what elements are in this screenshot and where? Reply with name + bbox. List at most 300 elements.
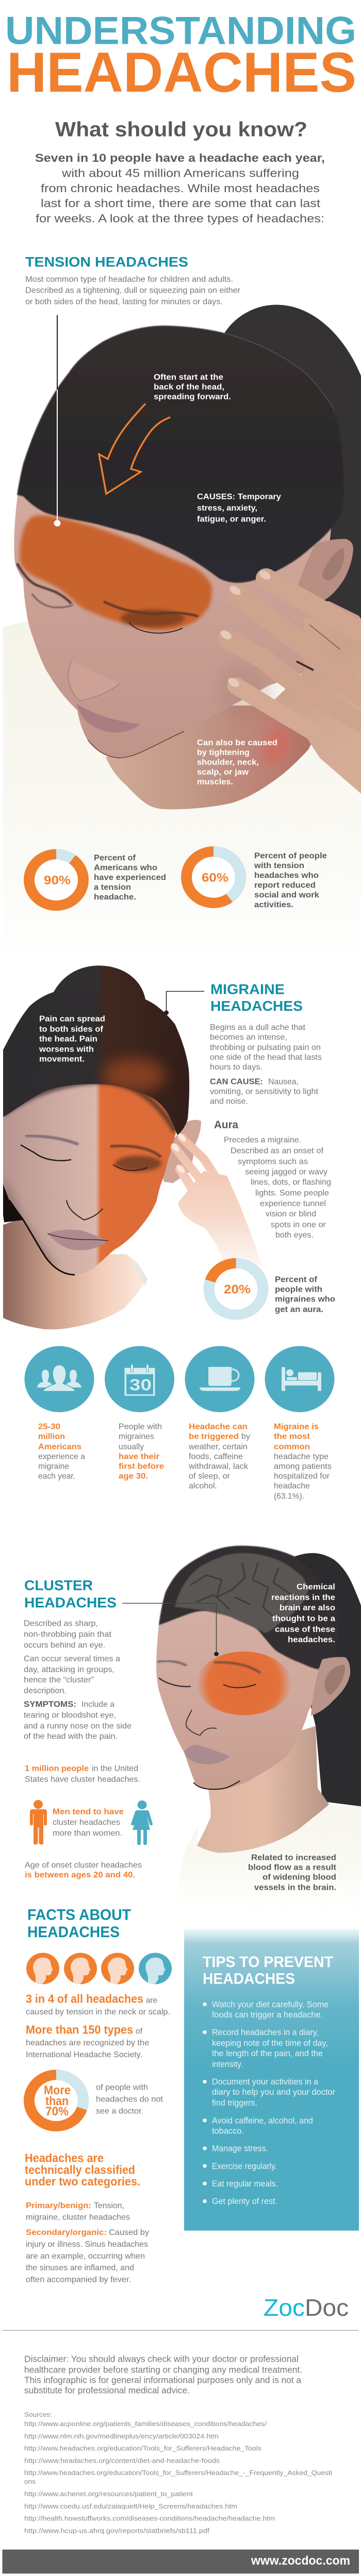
stat text: 20 percent: [275, 1275, 335, 1314]
nail top: [177, 1132, 187, 1143]
stat: 1 million people: in the United: [92, 1764, 138, 1773]
callout: blood flow: vessels in the brain.: [254, 1883, 336, 1892]
back hair: [224, 304, 361, 674]
left eye: [32, 594, 73, 607]
cluster description: Can occur several times a: [24, 1654, 120, 1664]
far finger: [328, 605, 356, 619]
finger one: [266, 578, 361, 632]
ear: [163, 1120, 201, 1183]
donut: more than 70 percent: More: [44, 2084, 71, 2097]
stat text: 60 percent: activities.: [254, 900, 293, 909]
illustration: tension head: [3, 304, 361, 960]
callout: pain can spread: to both sides of: [39, 1025, 104, 1034]
stat: triggers: [188, 1422, 251, 1490]
sources: http://www.headaches.org/content/diet-and-headache-foods: [24, 2457, 220, 2464]
cup handle: [232, 1369, 239, 1381]
stat text: 60 percent: [254, 851, 327, 909]
tip: diet: foods can trigger a headache.: [212, 2010, 323, 2020]
callout: causes: stress, anxiety,: [197, 503, 257, 513]
nail four: [226, 676, 241, 689]
face: [3, 1078, 181, 1279]
stat: men tend to have: more than women.: [53, 1828, 122, 1838]
disclaimer: substitute for professional medical advice.: [24, 2385, 190, 2395]
title: UNDERSTANDING: [5, 8, 356, 53]
nose: [67, 1200, 103, 1220]
cup: [208, 1367, 232, 1386]
stat text: 90 percent: have experienced: [94, 873, 166, 882]
donut: 90 percent: 90%: [44, 874, 71, 887]
stat text: 20 percent: Percent of: [275, 1275, 318, 1284]
aura heading: Aura: [214, 1118, 239, 1131]
calendar ring right: [146, 1364, 149, 1372]
callout: blood flow: [248, 1853, 337, 1892]
stat: most common type: headache: [274, 1481, 310, 1490]
fact: 3 in 4: caused by tension in the neck or scalp.: [26, 2008, 170, 2016]
migraine can cause: and noise.: [210, 1097, 248, 1106]
fact: 3 in 4: 3 in 4 of all headaches: [26, 1992, 143, 2005]
tip: stress: Manage stress.: [212, 2144, 268, 2153]
stat: most common type: headache type: [274, 1452, 329, 1461]
stat: 25-30 million: 25-30: [38, 1422, 60, 1431]
migraine description: throbbing or pulsating pain on: [210, 1043, 321, 1052]
aura text: seeing jagged or wavy: [245, 1167, 328, 1176]
stat: 1 million people: States have cluster headaches.: [25, 1775, 140, 1784]
panel: tips to prevent headaches: [184, 1929, 359, 2231]
arrow: [99, 404, 170, 494]
icon: coffee cup: [185, 1346, 255, 1412]
tips heading: [203, 1954, 333, 1987]
heading: migraine headaches: HEADACHES: [210, 997, 303, 1014]
icon: people: [25, 1346, 94, 1412]
palm: [268, 617, 361, 794]
finger low: [180, 1169, 211, 1220]
logo: ZocDoc: [264, 2295, 349, 2321]
stat: triggers: alcohol.: [189, 1481, 217, 1490]
sources: Sources:: [24, 2411, 52, 2418]
donut: 60 percent: [187, 846, 246, 903]
stat: 25-30 million: experience a: [38, 1452, 85, 1461]
ear inner: [324, 1665, 345, 1695]
stat: age of onset: [25, 1860, 142, 1879]
intro text: last for a short time, there are some that can last: [41, 197, 321, 210]
right person: [65, 1370, 81, 1387]
callout: can also be caused: by tightening: [197, 748, 250, 757]
stat text: 20 percent: get an aura.: [275, 1305, 323, 1314]
stat: before age 30: usually: [119, 1442, 144, 1451]
head four: [139, 1953, 172, 1984]
nose: [68, 662, 120, 701]
tip: document: find triggers.: [212, 2098, 257, 2108]
finger four: [236, 686, 309, 730]
aura text: vision or blind: [266, 1210, 316, 1218]
aura text: lights. Some people: [255, 1189, 329, 1197]
calendar frame: [125, 1368, 155, 1396]
fact: classified: [25, 2151, 140, 2188]
fact: secondary organic: Secondary/organic:: [26, 2228, 107, 2237]
ear: [297, 539, 353, 601]
stat text: 90 percent: Americans who: [94, 863, 157, 872]
tension description: [25, 275, 241, 306]
stat: most common type: (63.1%).: [274, 1492, 304, 1501]
cluster symptoms: [24, 1700, 132, 1741]
illustration: cluster head: [156, 1546, 361, 1911]
tips heading: TIPS TO PREVENT: [203, 1954, 333, 1971]
shirt: [173, 1804, 361, 1911]
sources: http://www.headaches.org/education/Tools_for_Sufferers/Headache_Tools: [24, 2445, 261, 2452]
stat text: 60 percent: report reduced: [254, 880, 316, 890]
right brow: [214, 1662, 260, 1673]
stat text: 60 percent: Percent of people: [254, 851, 327, 860]
hair: [17, 326, 344, 583]
nail mid: [170, 1142, 180, 1153]
stat text: 20 percent: people with: [275, 1285, 322, 1294]
stat: before age 30: migraines: [119, 1432, 154, 1441]
stat: 25-30 million: [38, 1422, 85, 1481]
nail low: [175, 1164, 186, 1174]
callout line with dot: [54, 315, 61, 527]
fact: do not see a doctor: [96, 2083, 163, 2115]
sources: http://www.achenet.org/resources/patient_to_patient: [24, 2490, 193, 2498]
sources: http://www.coedu.usf.edu/zalaquett/Help_Screens/headaches.htm: [24, 2502, 237, 2510]
callout: chemical reactions: cause of these: [275, 1625, 335, 1634]
stat text: 20 percent: migraines who: [275, 1295, 335, 1304]
callout: can also be caused: [197, 738, 277, 786]
migraine description: becomes an intense,: [210, 1032, 287, 1042]
stat: 25-30 million: Americans: [38, 1442, 81, 1451]
cluster description: non-throbbing pain that: [24, 1630, 112, 1639]
callout: chemical reactions: Chemical: [297, 1582, 335, 1591]
sources: http://www.acponline.org/patients_families/diseases_conditions/headaches/: [24, 2420, 267, 2428]
chin line: [193, 1781, 240, 1789]
right brow: [104, 602, 198, 616]
callout: pain can spread: movement.: [39, 1055, 85, 1064]
disclaimer: [24, 2354, 302, 2395]
callout: pain can spread: the head. Pain: [39, 1035, 97, 1044]
leader line: cluster: [122, 1603, 219, 1656]
callout: often start: [154, 372, 231, 401]
callout: chemical reactions: brain are also: [280, 1603, 335, 1613]
cluster symptoms: tearing or bloodshot eye,: [24, 1710, 116, 1720]
hand: [219, 569, 361, 794]
fact: 150 types: of: [136, 2027, 142, 2036]
heading: cluster headaches: [24, 1577, 117, 1611]
heading: migraine headaches: MIGRAINE: [210, 981, 285, 997]
callout: can also be caused: muscles.: [197, 777, 233, 786]
callout: causes: CAUSES: Temporary: [197, 492, 281, 501]
stat: 1 million people: [25, 1764, 140, 1784]
heading: cluster headaches: CLUSTER: [24, 1577, 93, 1594]
stat: most common type: among patients: [274, 1462, 332, 1471]
stat text: 90 percent: Percent of: [94, 853, 136, 862]
wrist: [178, 1171, 263, 1269]
footer bar: www.zocdoc.com: [251, 2554, 350, 2568]
migraine description: Begins as a dull ache that: [210, 1023, 306, 1032]
stat: most common type: the most: [274, 1432, 310, 1441]
callout: often start: back of the head,: [154, 382, 224, 392]
intro text: Seven in 10 people have a headache each year,: [35, 151, 325, 164]
tip: record: intensity.: [212, 2059, 243, 2069]
aura text: Precedes a migraine.: [224, 1136, 301, 1144]
hand: [170, 1132, 263, 1269]
callout: pain can spread: [39, 1014, 105, 1064]
stat text: 90 percent: [94, 853, 166, 902]
logo: ZocDoc: Zoc: [264, 2295, 305, 2321]
centre person: [43, 1365, 75, 1392]
aura text: [224, 1136, 331, 1240]
callout: can also be caused: scalp, or jaw: [197, 768, 249, 776]
stat: before age 30: first before: [119, 1462, 164, 1471]
intro text: [35, 151, 325, 225]
fact: do not see a doctor: see a doctor.: [96, 2107, 143, 2115]
forehead hairline blend: [3, 1082, 175, 1132]
logo: ZocDoc: Doc: [305, 2295, 349, 2321]
cluster symptoms: of the head with the pain.: [24, 1732, 118, 1741]
cluster description: hence the “cluster”: [24, 1675, 94, 1684]
cluster description: description.: [24, 1686, 67, 1695]
right eye: [223, 1684, 256, 1688]
aura text: spots in one or: [271, 1220, 326, 1229]
migraine description: [210, 1023, 322, 1072]
callout: pain can spread: Pain can spread: [39, 1014, 105, 1024]
leader line: migraine: [164, 991, 204, 1015]
tip: diet: Watch your diet carefully. Some: [212, 1999, 329, 2009]
footer bar: [2, 2550, 359, 2573]
left brow: [25, 1136, 78, 1144]
callout: can also be caused: Can also be caused: [197, 738, 277, 747]
stat: before age 30: People with: [119, 1422, 162, 1431]
sleeper arm: [287, 1377, 297, 1380]
right eye shadow: [121, 609, 185, 627]
neck: [3, 1215, 145, 1329]
left hair strand: [3, 1184, 23, 1223]
migraine description: one side of the head that lasts: [210, 1053, 322, 1062]
disclaimer: Disclaimer: You should always check with your doctor or professional: [24, 2354, 299, 2364]
nose: [186, 1710, 217, 1735]
subtitle: What should you know?: [55, 117, 307, 141]
tips heading: HEADACHES: [203, 1971, 295, 1987]
fact: classified: Headaches are: [25, 2151, 104, 2164]
tip: avoid: tobacco.: [212, 2126, 244, 2136]
donut: 20 percent: [205, 1258, 263, 1315]
right brow: [110, 1146, 161, 1157]
cheek shading: [217, 662, 268, 720]
stat: men tend to have: [53, 1807, 124, 1838]
aura text: experience tunnel: [260, 1199, 326, 1208]
heading: facts about headaches: HEADACHES: [27, 1924, 120, 1941]
intro text: for weeks. A look at the three types of headaches:: [36, 212, 324, 225]
intro text: with about 45 million Americans suffering: [61, 166, 299, 179]
left eye: [159, 1678, 191, 1687]
finger three: [228, 639, 361, 723]
ear: [311, 1657, 350, 1716]
cluster symptoms: and a runny nose on the side: [24, 1721, 132, 1731]
callout: blood flow: Related to increased: [251, 1853, 336, 1862]
migraine can cause: CAN CAUSE:: [210, 1077, 263, 1086]
neck: [106, 705, 330, 809]
fact: classified: technically classified: [25, 2163, 135, 2176]
icon: bed: [265, 1346, 334, 1412]
jaw line: [9, 1200, 75, 1275]
saucer: [200, 1387, 240, 1391]
lips: [184, 1745, 230, 1765]
fact: 150 types: headaches are recognized by the: [26, 2038, 149, 2047]
panel: tension headaches heading: TENSION HEADACHES: [25, 254, 188, 269]
fact: secondary organic: often accompanied by fever.: [26, 2275, 131, 2284]
stat: most common type: Migraine is: [274, 1422, 319, 1431]
cluster symptoms: SYMPTOMS:: [24, 1700, 76, 1709]
stat text: 60 percent: social and work: [254, 890, 319, 900]
heading: facts about headaches: FACTS ABOUT: [27, 1907, 131, 1924]
fact: secondary organic: the sinuses are inflamed, and: [26, 2263, 134, 2273]
left brow: [158, 1661, 187, 1666]
stat: men tend to have: cluster headaches: [53, 1818, 120, 1827]
callout: can also be caused: shoulder, neck,: [197, 758, 259, 767]
icon: man: [30, 1800, 47, 1844]
tip: diet: [203, 1999, 329, 2020]
donut: more than 70 percent: 70%: [45, 2105, 69, 2119]
callout: often start: Often start at the: [154, 372, 223, 382]
sources: http://www.nlm.nih.gov/medlineplus/ency/article/003024.htm: [24, 2432, 219, 2440]
left brow: [17, 564, 71, 604]
bun and hair: [3, 965, 189, 1135]
fact: 150 types: More than 150 types: [26, 2023, 133, 2036]
fact: secondary organic: Caused by: [109, 2228, 150, 2237]
donut: 20 percent: 20%: [224, 1283, 251, 1296]
illustration: migraine head: [3, 965, 263, 1329]
ear inner: [322, 548, 344, 581]
cluster description: occurs behind an eye.: [24, 1640, 105, 1650]
finger two: [237, 595, 361, 696]
tip: record: keeping note of the time of day,: [212, 2038, 328, 2048]
disclaimer: This infographic is for general informational purposes only and is not a: [24, 2375, 301, 2385]
head three: [101, 1953, 134, 1984]
stat: age of onset: Age of onset cluster headaches: [25, 1860, 142, 1870]
finger top: [182, 1138, 228, 1195]
callout: causes: [197, 492, 281, 524]
donut: 90 percent: [29, 849, 84, 906]
jaw shading left: [3, 1176, 58, 1269]
fact: do not see a doctor: headaches do not: [96, 2095, 163, 2104]
bun left shade: [54, 965, 99, 992]
lips: [47, 1230, 108, 1250]
heading: cluster headaches: HEADACHES: [24, 1595, 117, 1611]
stat: most common type: hospitalized for: [274, 1471, 330, 1481]
stat: 25-30 million: each year.: [38, 1471, 75, 1481]
brain: [175, 1553, 308, 1633]
callout: chemical reactions: thought to be a: [272, 1614, 336, 1623]
sources: http://www.hcup-us.ahrq.gov/reports/statbriefs/sb111.pdf: [24, 2527, 209, 2534]
cluster description: day, attacking in groups,: [24, 1665, 114, 1674]
stat: triggers: Headache can: [189, 1422, 248, 1431]
callout: causes: fatigue, or anger.: [197, 515, 266, 524]
donut: more than 70 percent: [29, 2070, 89, 2126]
fact: primary benign: Primary/benign:: [26, 2201, 91, 2210]
sources: http://health.howstuffworks.com/diseases-conditions/headache/headache.htm: [24, 2515, 275, 2522]
tip: document: Document your activities in a: [212, 2077, 319, 2087]
face: [14, 326, 340, 758]
shirt: [3, 621, 361, 960]
cluster description: Described as sharp,: [24, 1619, 98, 1628]
donut: 60 percent: 60%: [202, 871, 228, 885]
pain glow: [196, 1652, 291, 1715]
stat text: 90 percent: headache.: [94, 892, 136, 902]
migraine description: hours to days.: [210, 1062, 262, 1072]
cluster description: [24, 1619, 120, 1695]
tip: document: [203, 2077, 335, 2108]
back hair: [289, 1553, 361, 1806]
stat: age of onset: is between ages 20 and 40.: [25, 1870, 135, 1879]
stat: men tend to have: Men tend to have: [53, 1807, 124, 1816]
tip: avoid: Avoid caffeine, alcohol, and: [212, 2116, 313, 2125]
callout: pain can spread: worsens with: [39, 1045, 94, 1054]
stat text: 60 percent: with tension: [254, 861, 304, 870]
fact: do not see a doctor: of people with: [96, 2083, 148, 2092]
stat: 1 million people: 1 million people: [25, 1764, 89, 1773]
stat text: 60 percent: headaches who: [254, 871, 319, 880]
stat: most common type: common: [274, 1442, 310, 1451]
stat: before age 30: have their: [119, 1452, 160, 1461]
sources: [24, 2411, 332, 2534]
fact: primary benign: Tension,: [94, 2201, 124, 2210]
fact: 3 in 4: are: [146, 1996, 157, 2005]
stat: triggers: of sleep, or: [189, 1471, 231, 1481]
blanket: [298, 1372, 317, 1380]
stat: triggers: weather, certain: [188, 1442, 248, 1451]
stat: most common type: [274, 1422, 332, 1501]
fact: secondary organic: injury or illness. Sinus headaches: [26, 2240, 148, 2249]
head one: [26, 1953, 59, 1984]
mouth line: [47, 1233, 108, 1241]
migraine can cause: [210, 1077, 319, 1106]
stat: triggers: withdrawal, lack: [188, 1462, 249, 1471]
stat text: 90 percent: a tension: [94, 883, 131, 892]
tension description: Described as a tightening, dull or squeezing pain on either: [25, 286, 241, 295]
tip: record: Record headaches in a diary,: [212, 2028, 319, 2037]
stat: 25-30 million: million: [38, 1432, 65, 1441]
icon row: heads: [26, 1953, 172, 1984]
nail three: [219, 629, 233, 641]
neck: [197, 1726, 329, 1853]
icon: calendar: [105, 1346, 174, 1412]
stat: triggers: be triggered: [189, 1432, 239, 1441]
callout: often start: spreading forward.: [154, 392, 231, 401]
fact: secondary organic: [26, 2228, 150, 2284]
stat: triggers: foods, caffeine: [189, 1452, 243, 1461]
heading: facts about headaches: [27, 1907, 131, 1941]
icon: woman: [131, 1801, 153, 1845]
donut: more than 70 percent: than: [45, 2095, 69, 2108]
sleeper head: [286, 1369, 293, 1376]
title: [5, 8, 356, 104]
aura text: both eyes.: [275, 1230, 314, 1240]
sources: ons: [24, 2478, 36, 2485]
fact: 150 types: [26, 2023, 149, 2059]
right eye: [113, 1164, 147, 1171]
nail two: [228, 584, 242, 597]
nails: [258, 569, 272, 582]
hair cap: [159, 1546, 340, 1669]
stat: before age 30: age 30.: [119, 1471, 148, 1481]
pain area: [20, 515, 212, 631]
fact: 150 types: International Headache Society.: [26, 2050, 142, 2059]
intro text: from chronic headaches. While most headaches: [41, 181, 320, 195]
tension description: or both sides of the head, lasting for minutes or days.: [25, 297, 223, 306]
aura text: symptoms such as: [238, 1157, 308, 1166]
tension description: Most common type of headache for children and adults.: [25, 275, 233, 284]
right eyelid: [129, 622, 183, 633]
migraine can cause: Nausea,: [268, 1077, 299, 1086]
finger gap two: [297, 662, 314, 670]
